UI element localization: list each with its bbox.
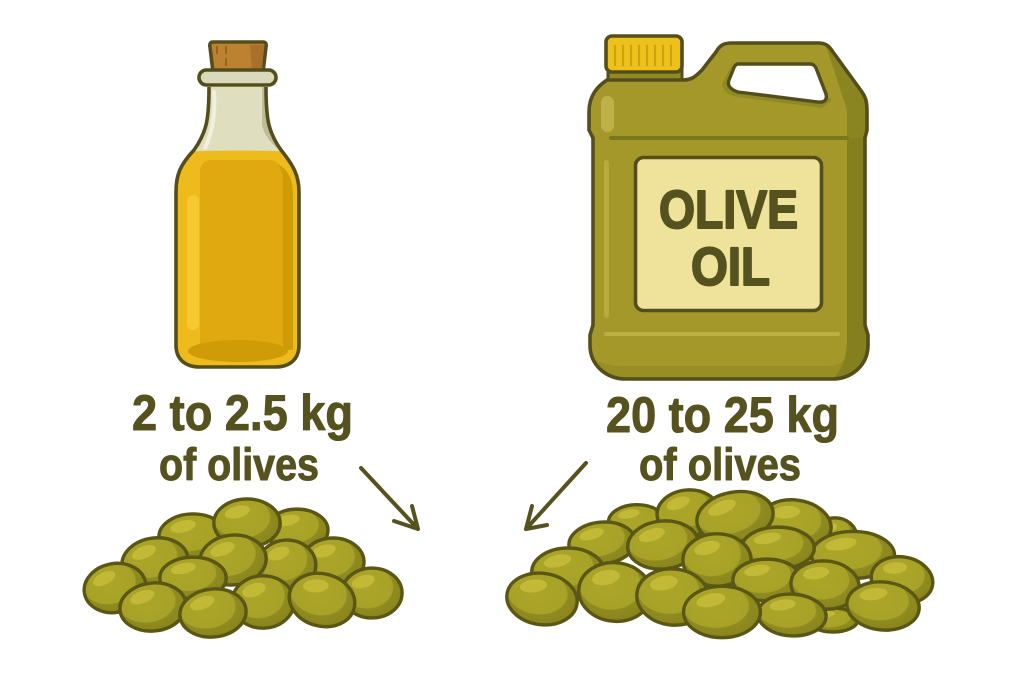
arrow: right-pointing down to the centre — [361, 468, 418, 529]
bottle glass — [176, 87, 299, 367]
left olive pile — [80, 499, 402, 640]
jug rib line — [611, 136, 847, 140]
jug handle opening — [728, 64, 826, 102]
heading: small bottle quantity — [132, 385, 353, 490]
heading: small bottle quantity: of olives — [159, 439, 319, 490]
icon: olive oil bottle — [170, 42, 305, 370]
icon: olive oil jug — [589, 36, 870, 385]
jug label — [636, 158, 822, 310]
heading: jug quantity — [606, 387, 839, 490]
jug label: OLIVE — [659, 180, 798, 240]
jug body — [589, 43, 868, 379]
heading: jug quantity: 20 to 25 kg — [606, 387, 839, 443]
heading: jug quantity: of olives — [639, 439, 801, 490]
heading: small bottle quantity: 2 to 2.5 kg — [132, 385, 353, 441]
right olive pile — [503, 486, 937, 638]
jug label: OIL — [691, 237, 770, 297]
jug handle shadow — [722, 62, 832, 108]
arrow: left-pointing down to the centre — [526, 463, 586, 529]
bottle cork — [210, 42, 266, 72]
bottle oil fill — [178, 87, 298, 366]
jug cap — [606, 36, 682, 72]
jug neck — [608, 68, 682, 84]
bottle collar — [199, 70, 276, 85]
